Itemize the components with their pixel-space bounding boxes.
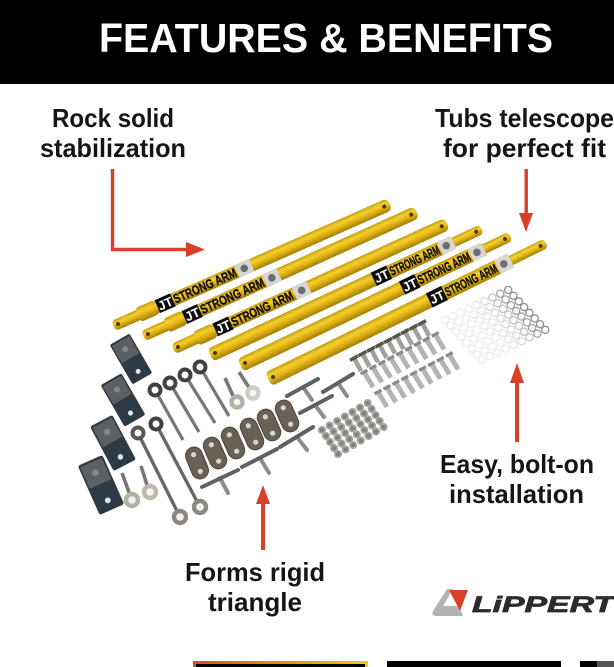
logo wordmark: LiPPERT — [472, 592, 614, 617]
strong arm decal: JT — [427, 287, 447, 307]
arrow: up to plates — [256, 485, 270, 550]
arrow: elbow to tubes — [112, 169, 205, 257]
yellow tube 5 — [237, 230, 514, 372]
bottom thumbnail: black — [387, 661, 561, 667]
strong arm decal — [371, 236, 457, 287]
label: forms rigid triangle: triangle — [208, 587, 302, 617]
strong arm decal — [399, 242, 488, 295]
label: tubs telescope for perfect fit — [435, 103, 614, 163]
yellow tube 6 — [265, 236, 550, 386]
T-bolts — [202, 374, 353, 493]
title: FEATURES & BENEFITS — [99, 15, 553, 61]
mounting brackets — [78, 334, 152, 515]
bottom thumbnail: highlighted — [193, 661, 368, 667]
bottom thumbnail: partial — [580, 661, 614, 667]
strong arm decal: JT — [155, 294, 175, 314]
long eye bolts with end tabs — [132, 418, 206, 523]
strong arm decal: JT — [213, 317, 233, 337]
strong arm decal: JT — [372, 266, 392, 286]
label: easy bolt-on installation — [440, 449, 594, 509]
strong arm decal: STRONG ARM — [198, 275, 267, 317]
logo mark — [432, 589, 468, 616]
yellow tube 1 — [110, 197, 393, 333]
arrow: down to telescoping end — [519, 169, 533, 232]
label: rock solid stabilization: stabilization — [40, 133, 186, 163]
nuts — [319, 400, 387, 457]
label: rock solid stabilization — [40, 103, 186, 163]
washers — [441, 286, 549, 364]
label: tubs telescope for perfect fit: for perfect fit — [443, 133, 606, 163]
strong arm decal: STRONG ARM — [442, 261, 500, 299]
link plates — [183, 397, 301, 481]
strong arm decal: JT — [400, 275, 420, 295]
label: easy bolt-on installation: Easy, bolt-on — [440, 449, 594, 479]
strong arm decal — [212, 280, 312, 337]
strong arm decal — [154, 258, 255, 314]
yellow tube 2 — [140, 205, 420, 343]
header banner — [0, 0, 614, 84]
strong arm decal: STRONG ARM — [171, 265, 239, 306]
label: easy bolt-on installation: installation — [449, 479, 584, 509]
strong arm decal: STRONG ARM — [415, 249, 473, 287]
yellow tube 4 — [207, 223, 485, 362]
eye bolts — [150, 362, 229, 440]
label: rock solid stabilization: Rock solid — [52, 103, 174, 133]
yellow tube 3 — [170, 217, 450, 356]
small threaded tabs — [122, 372, 258, 506]
strong arm decal — [426, 253, 514, 308]
strong arm decal: STRONG ARM — [229, 288, 296, 329]
strong arm decal: JT — [182, 304, 202, 324]
label: forms rigid triangle: Forms rigid — [185, 557, 325, 587]
Lippert logo — [432, 589, 614, 617]
bolts — [350, 321, 458, 407]
strong arm decal: STRONG ARM — [387, 242, 442, 279]
arrow: up to washers — [510, 363, 524, 442]
label: forms rigid triangle — [185, 557, 325, 617]
